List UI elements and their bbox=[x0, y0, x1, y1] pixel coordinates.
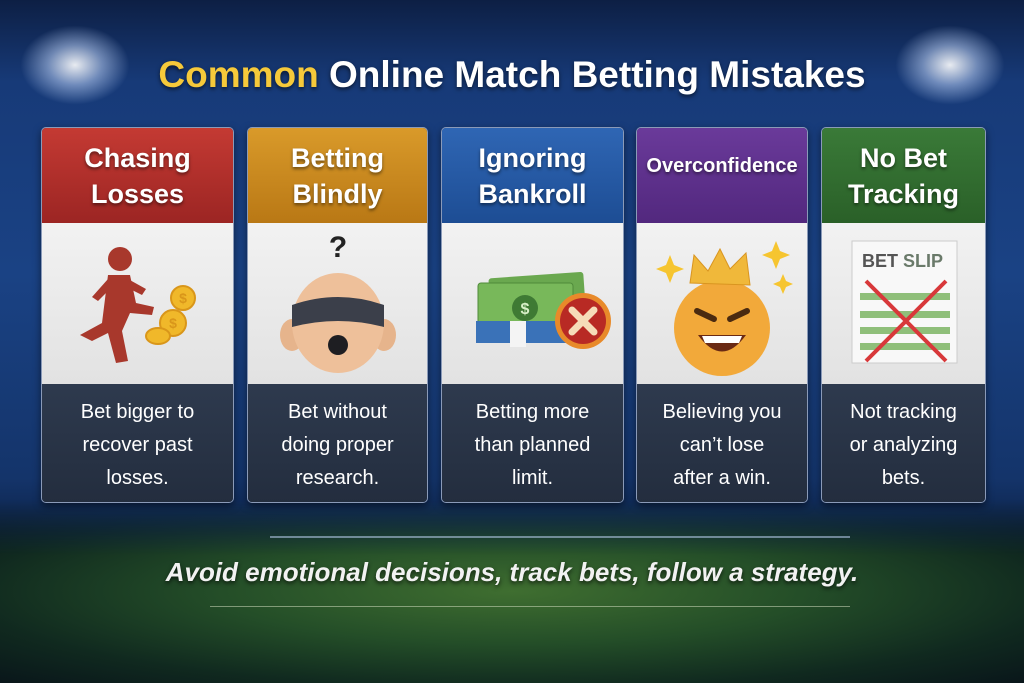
icon: blindfolded head bbox=[248, 223, 427, 384]
heading: Overconfidence bbox=[646, 155, 798, 177]
description: losses. bbox=[106, 467, 169, 489]
icon: money with x: $ bbox=[520, 301, 529, 318]
description: than planned bbox=[475, 434, 590, 456]
icon: running man with coins bbox=[42, 223, 233, 384]
heading: Blindly bbox=[292, 178, 382, 208]
panel: overconfidence bbox=[636, 127, 808, 503]
heading: Ignoring bbox=[478, 142, 586, 172]
description: doing proper bbox=[281, 434, 394, 456]
heading bbox=[248, 128, 427, 223]
icon: crossed bet slip bbox=[822, 223, 985, 384]
heading: Bankroll bbox=[478, 178, 587, 208]
description bbox=[637, 384, 807, 504]
description: Not tracking bbox=[850, 401, 957, 423]
description: Bet bigger to bbox=[81, 401, 194, 423]
description: Betting more bbox=[476, 401, 589, 423]
description: limit. bbox=[512, 467, 553, 489]
description bbox=[822, 384, 985, 504]
description: bets. bbox=[882, 467, 925, 489]
description: recover past bbox=[82, 434, 193, 456]
description: can’t lose bbox=[680, 434, 764, 456]
footer tagline: Avoid emotional decisions, track bets, follow a strategy. bbox=[166, 557, 858, 587]
description bbox=[248, 384, 427, 504]
panel: no bet tracking bbox=[821, 127, 986, 503]
heading: Chasing bbox=[84, 142, 191, 172]
description bbox=[42, 384, 233, 504]
icon: running man with coins: $ bbox=[169, 315, 177, 331]
icon: crowned smiley bbox=[637, 223, 807, 384]
title: Common Online Match Betting Mistakes bbox=[158, 54, 866, 95]
description: or analyzing bbox=[850, 434, 957, 456]
heading bbox=[822, 128, 985, 223]
heading bbox=[442, 128, 623, 223]
heading: Tracking bbox=[848, 178, 959, 208]
description: Bet without bbox=[288, 401, 387, 423]
icon: running man with coins: $ bbox=[179, 290, 187, 306]
icon: money with x bbox=[442, 223, 623, 384]
panel: betting blindly bbox=[247, 127, 428, 503]
description: research. bbox=[296, 467, 379, 489]
panel: chasing losses bbox=[41, 127, 234, 503]
heading: No Bet bbox=[860, 142, 947, 172]
icon: blindfolded head: ? bbox=[328, 231, 347, 264]
description bbox=[442, 384, 623, 504]
heading bbox=[42, 128, 233, 223]
description: after a win. bbox=[673, 467, 771, 489]
description: Believing you bbox=[663, 401, 781, 423]
panel: ignoring bankroll bbox=[441, 127, 624, 503]
heading: Betting bbox=[291, 142, 384, 172]
heading: Losses bbox=[91, 178, 184, 208]
heading bbox=[637, 128, 807, 223]
icon: crossed bet slip: BET SLIP bbox=[862, 251, 943, 271]
